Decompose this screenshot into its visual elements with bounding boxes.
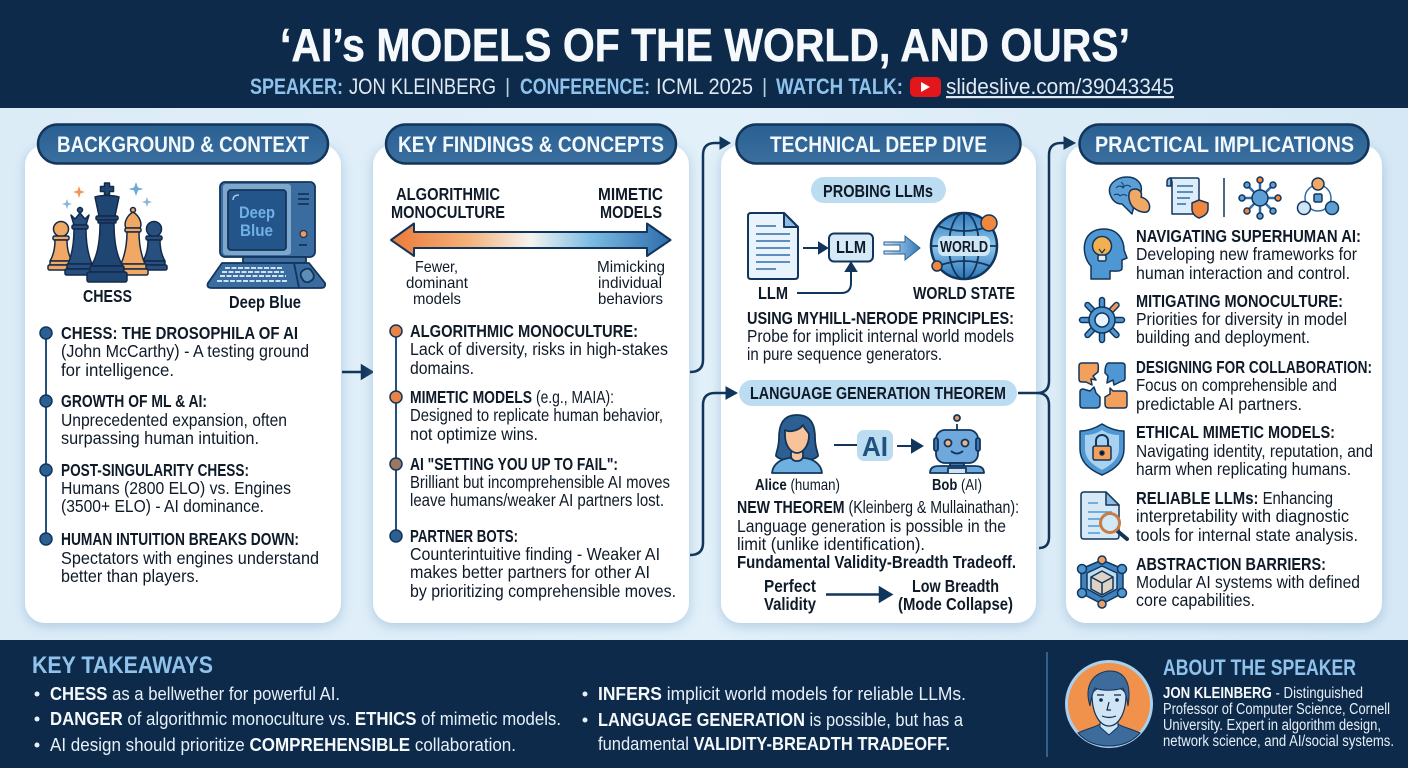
icon: brain and hand <box>1109 177 1150 214</box>
arrow: AI to Bob <box>897 440 922 452</box>
spectrum captions: Fewer, <box>415 259 458 276</box>
tradeoff: low breadth: Low Breadth <box>912 576 999 596</box>
heading pill: KEY FINDINGS & CONCEPTS <box>398 132 664 157</box>
about the speaker text <box>1163 685 1394 750</box>
page background <box>0 108 1408 640</box>
text: post-singularity chess: POST-SINGULARITY CHESS: <box>61 460 249 480</box>
heading pill <box>736 124 1020 164</box>
text: human intuition breaks down: Spectators with engines understand <box>61 548 319 568</box>
icon: modular hexagon <box>1078 556 1126 608</box>
icon: Deep Blue computer <box>208 182 325 288</box>
label: LLM: LLM <box>758 283 788 303</box>
spectrum labels: ALGORITHMIC <box>396 184 500 204</box>
label: world state: WORLD STATE <box>913 283 1015 303</box>
timeline <box>40 327 52 545</box>
speaker line: JON KLEINBERG <box>349 74 496 99</box>
text: human intuition breaks down: better than players. <box>61 566 199 586</box>
item: abstraction barriers: core capabilities. <box>1136 590 1255 610</box>
spectrum labels: MIMETIC <box>598 184 663 204</box>
item: reliable LLMs: RELIABLE LLMs: Enhancing <box>1136 488 1333 508</box>
subheading: probing LLMs <box>811 177 946 203</box>
text: growth of ML and AI: GROWTH OF ML & AI: <box>61 391 207 411</box>
icon: Deep Blue computer: Blue <box>240 221 273 240</box>
text: algorithmic monoculture: Lack of diversity, risks in high-stakes <box>410 339 668 359</box>
card <box>373 145 689 623</box>
subheading: probing LLMs: PROBING LLMs <box>823 181 933 201</box>
icon: video play button <box>910 77 941 97</box>
icon: Bob robot <box>930 415 984 473</box>
label: Deep Blue: Deep Blue <box>229 292 301 312</box>
item: abstraction barriers <box>1078 554 1360 610</box>
text: growth of ML and AI <box>61 391 287 448</box>
panel: background and context <box>25 124 341 623</box>
spectrum captions: individual <box>598 275 662 292</box>
item: mitigating monoculture: Priorities for diversity in model <box>1136 309 1347 329</box>
text: chess the drosophila <box>61 323 309 380</box>
heading pill <box>386 124 676 164</box>
item: reliable LLMs: tools for internal state analysis. <box>1136 525 1358 545</box>
item: reliable LLMs <box>1081 488 1358 545</box>
label: Bob: Bob (AI) <box>932 477 982 494</box>
text: new theorem <box>737 497 1019 572</box>
takeaways left column <box>34 683 561 755</box>
spectrum labels <box>391 184 663 222</box>
text: mimetic models: Designed to replicate human behavior, <box>410 405 663 425</box>
heading pill: BACKGROUND & CONTEXT <box>57 132 309 157</box>
text: algorithmic monoculture <box>410 321 668 378</box>
card <box>1066 145 1382 623</box>
spectrum captions: behaviors <box>598 291 663 308</box>
subheading: language generation theorem <box>739 380 1017 406</box>
heading pill <box>1080 124 1368 164</box>
item: navigating superhuman AI: Developing new frameworks for <box>1136 244 1357 264</box>
item: abstraction barriers: Modular AI systems with defined <box>1136 572 1360 592</box>
card <box>25 145 341 623</box>
heading pill <box>38 124 328 164</box>
takeaways right column: INFERS implicit world models for reliable LLMs. <box>598 683 966 704</box>
heading pill: TECHNICAL DEEP DIVE <box>770 132 987 157</box>
item: ethical mimetic models <box>1080 422 1373 479</box>
box: LLM <box>829 234 873 262</box>
text: Myhill-Nerode principles: in pure sequence generators. <box>747 344 942 364</box>
text: growth of ML and AI: Unprecedented expansion, often <box>61 410 287 430</box>
spectrum arrow <box>391 224 670 256</box>
text: partner bots <box>410 526 676 601</box>
icon: document <box>748 213 798 279</box>
text: chess the drosophila: for intelligence. <box>61 360 174 380</box>
text: setting you up to fail <box>410 454 670 510</box>
arrow: document to LLM <box>803 243 827 253</box>
card <box>721 145 1036 623</box>
takeaways left column: CHESS as a bellwether for powerful AI. <box>50 683 340 704</box>
arrow: background to findings <box>342 366 372 378</box>
text: algorithmic monoculture: ALGORITHMIC MONOCULTURE: <box>410 321 638 341</box>
arrow: findings to theorem section <box>690 387 737 555</box>
heading pill: PRACTICAL IMPLICATIONS <box>1095 132 1354 157</box>
speaker line: | <box>762 76 767 98</box>
box: AI: AI <box>862 431 888 462</box>
speaker line: CONFERENCE: <box>520 74 650 99</box>
speaker line: | <box>505 76 510 98</box>
text: chess the drosophila: (John McCarthy) - A testing ground <box>61 341 309 361</box>
icon: shield with lock <box>1080 424 1124 475</box>
divider <box>1046 652 1048 757</box>
item: designing for collaboration: predictable AI partners. <box>1136 394 1302 414</box>
icon: chess pieces <box>48 182 167 282</box>
item: ethical mimetic models: Navigating identity, reputation, and <box>1136 441 1373 461</box>
arrow: findings to probing section <box>690 137 730 372</box>
speaker line <box>250 74 1174 99</box>
header band <box>0 0 1408 108</box>
spectrum labels: MONOCULTURE <box>391 202 505 222</box>
icon: people network <box>1298 178 1338 214</box>
panel: key findings and concepts <box>373 124 689 623</box>
icon: world globe <box>931 213 997 279</box>
text: partner bots: by prioritizing comprehensible moves. <box>410 581 676 601</box>
about the speaker heading: ABOUT THE SPEAKER <box>1163 655 1356 680</box>
speaker line: ICML 2025 <box>656 74 753 99</box>
text: algorithmic monoculture: domains. <box>410 358 474 378</box>
arrow: deep dive to implications <box>1018 137 1075 548</box>
item: ethical mimetic models: ETHICAL MIMETIC MODELS: <box>1136 422 1335 442</box>
text: setting you up to fail: leave humans/weaker AI partners lost. <box>410 490 664 510</box>
text: mimetic models <box>410 387 663 444</box>
text: human intuition breaks down: HUMAN INTUITION BREAKS DOWN: <box>61 529 299 549</box>
tradeoff: low breadth <box>898 576 1013 614</box>
speaker line: slideslive.com/39043345 <box>946 74 1174 99</box>
item: reliable LLMs: interpretability with diagnostic <box>1136 506 1349 526</box>
item: abstraction barriers: ABSTRACTION BARRIERS: <box>1136 554 1326 574</box>
text: setting you up to fail: Brilliant but incomprehensible AI moves <box>410 472 670 492</box>
icon: document with magnifier <box>1081 492 1127 539</box>
panel: technical deep dive <box>721 124 1036 623</box>
spectrum labels: MODELS <box>600 202 662 222</box>
item: navigating superhuman AI: NAVIGATING SUPERHUMAN AI: <box>1136 226 1361 246</box>
tradeoff: perfect validity: Validity <box>764 594 816 614</box>
label: Alice: Alice (human) <box>755 477 840 494</box>
text: partner bots: PARTNER BOTS: <box>410 526 518 546</box>
icon: Alice <box>772 415 822 473</box>
takeaways right column: fundamental VALIDITY-BREADTH TRADEOFF. <box>598 733 950 754</box>
icon: joining pieces <box>1079 363 1127 408</box>
text: Myhill-Nerode principles: Probe for implicit internal world models <box>747 326 1014 346</box>
text: Myhill-Nerode principles: USING MYHILL-NERODE PRINCIPLES: <box>747 308 1014 328</box>
arrow: LLM to world <box>884 236 920 260</box>
icon: gear network <box>1082 300 1122 340</box>
arrow: LLM label feedback <box>797 263 856 293</box>
takeaways left column: DANGER of algorithmic monoculture vs. ETHICS of mimetic models. <box>50 708 561 729</box>
icon: world globe: WORLD <box>940 239 988 256</box>
spectrum captions: Mimicking <box>597 259 665 276</box>
text: partner bots: Counterintuitive finding - Weaker AI <box>410 544 660 564</box>
item: mitigating monoculture: building and deployment. <box>1136 327 1310 347</box>
item: designing for collaboration: Focus on comprehensible and <box>1136 375 1337 395</box>
icon: network gear <box>1239 177 1281 219</box>
takeaways right column <box>582 683 966 754</box>
spectrum captions <box>406 259 665 308</box>
subheading: language generation theorem: LANGUAGE GENERATION THEOREM <box>750 383 1006 403</box>
icon row <box>1109 177 1338 219</box>
arrow: Alice to AI <box>834 444 857 446</box>
timeline <box>390 325 402 542</box>
icon: speaker portrait <box>1066 662 1152 746</box>
takeaways right column: LANGUAGE GENERATION is possible, but has a <box>598 709 964 730</box>
spectrum captions: models <box>413 291 461 308</box>
tradeoff: perfect validity <box>764 576 816 614</box>
takeaways left column: AI design should prioritize COMPREHENSIBLE collaboration. <box>50 734 516 755</box>
text: growth of ML and AI: surpassing human intuition. <box>61 428 259 448</box>
about the speaker text: JON KLEINBERG - Distinguished <box>1163 685 1363 702</box>
text: new theorem: limit (unlike identification). <box>737 534 925 554</box>
text: mimetic models: not optimize wins. <box>410 424 538 444</box>
title: ‘AI’s MODELS OF THE WORLD, AND OURS’ <box>280 19 1130 71</box>
item: mitigating monoculture <box>1082 291 1347 347</box>
item: designing for collaboration <box>1079 357 1372 414</box>
icon: Deep Blue computer: Deep <box>239 203 275 222</box>
item: navigating superhuman AI: human interaction and control. <box>1136 263 1350 283</box>
text: partner bots: makes better partners for other AI <box>410 562 650 582</box>
text: human intuition breaks down <box>61 529 319 586</box>
text: setting you up to fail: AI "SETTING YOU UP TO FAIL": <box>410 454 618 474</box>
text: post-singularity chess <box>61 460 291 516</box>
key takeaways heading: KEY TAKEAWAYS <box>32 652 213 679</box>
item: mitigating monoculture: MITIGATING MONOCULTURE: <box>1136 291 1343 311</box>
speaker line: SPEAKER: <box>250 74 343 99</box>
text: post-singularity chess: (3500+ ELO) - AI dominance. <box>61 496 264 516</box>
item: ethical mimetic models: harm when replicating humans. <box>1136 459 1351 479</box>
item: navigating superhuman AI <box>1084 226 1361 283</box>
tradeoff: low breadth: (Mode Collapse) <box>898 594 1013 614</box>
divider <box>1223 178 1225 217</box>
text: chess the drosophila: CHESS: THE DROSOPHILA OF AI <box>61 323 298 343</box>
label: chess: CHESS <box>83 286 132 306</box>
text: post-singularity chess: Humans (2800 ELO) vs. Engines <box>61 478 291 498</box>
panel: practical implications <box>1066 124 1382 623</box>
text: new theorem: Fundamental Validity-Breadth Tradeoff. <box>737 552 1016 572</box>
speaker line: WATCH TALK: <box>776 74 903 99</box>
text: new theorem: Language generation is possible in the <box>737 516 1006 536</box>
tradeoff: perfect validity: Perfect <box>764 576 816 596</box>
footer band <box>0 640 1408 768</box>
box: LLM: LLM <box>836 237 866 257</box>
icon: scroll with shield <box>1167 178 1208 218</box>
spectrum captions: dominant <box>406 275 469 292</box>
icon: head with lightbulb <box>1084 229 1127 279</box>
arrow: tradeoff <box>826 588 891 601</box>
text: new theorem: NEW THEOREM (Kleinberg & Mullainathan): <box>737 497 1019 517</box>
text: mimetic models: MIMETIC MODELS (e.g., MAIA): <box>410 387 614 407</box>
text: Myhill-Nerode principles <box>747 308 1014 364</box>
